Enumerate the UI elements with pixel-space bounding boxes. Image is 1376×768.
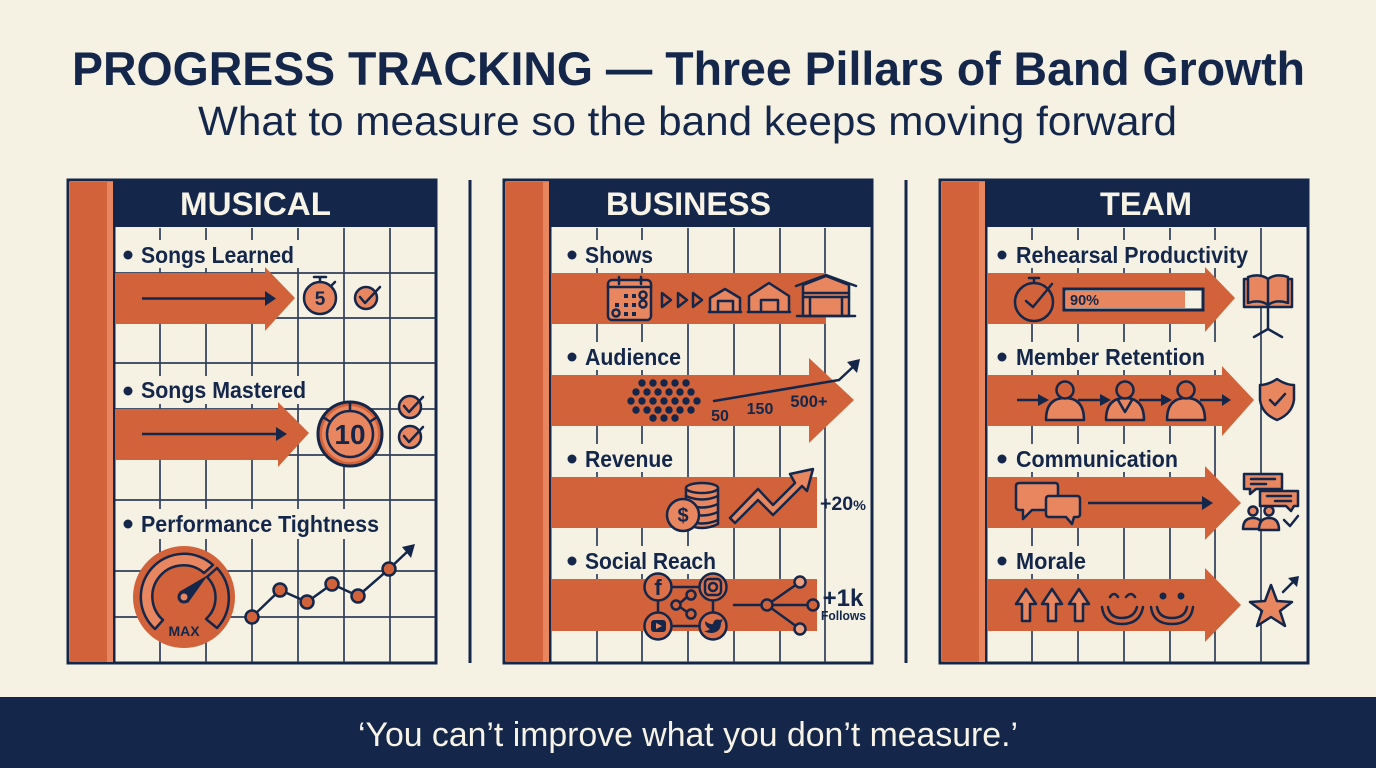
metric: songs learned <box>115 240 380 331</box>
metric: social reach: Social Reach <box>585 548 716 574</box>
panel: musical <box>68 180 436 663</box>
metric: morale: Morale <box>1016 548 1086 574</box>
metric: social reach <box>551 546 866 640</box>
icon: shield <box>1260 379 1294 420</box>
chart: audience growth <box>711 359 860 425</box>
heading: musical: MUSICAL <box>180 186 331 222</box>
icon: double check <box>399 396 423 448</box>
icon: stopwatch 5: 5 <box>315 289 326 310</box>
icon: large venue <box>796 275 856 316</box>
metric: audience <box>551 342 860 443</box>
value: +20%: +20% <box>820 494 867 515</box>
metric: rehearsal productivity: Rehearsal Productivity <box>1016 242 1248 268</box>
icon: small venue <box>709 289 741 312</box>
icon: triangles <box>662 293 702 307</box>
icon: calendar <box>608 277 651 320</box>
heading: team <box>985 180 1308 227</box>
icon: check <box>355 287 380 309</box>
chart: audience growth: 500+ <box>790 393 828 411</box>
icon: gauge: MAX <box>168 623 200 639</box>
icon: medium venue <box>748 283 790 312</box>
title: PROGRESS TRACKING — Three Pillars of Band Growth <box>72 42 1305 95</box>
icon: stopwatch 5 <box>304 277 336 314</box>
icon: coins <box>667 483 718 531</box>
arrow: star rising <box>1283 576 1299 592</box>
metric: audience: Audience <box>585 344 681 370</box>
progress bar 90% <box>1064 289 1203 310</box>
metric: member retention: Member Retention <box>1016 344 1205 370</box>
icon: badge 10: 10 <box>334 419 366 450</box>
metric: songs mastered <box>115 376 423 467</box>
footer banner: ‘You can’t improve what you don’t measure.’ <box>358 716 1018 754</box>
icon: gauge <box>133 546 235 648</box>
icon: music stand <box>1244 275 1292 337</box>
metric: performance tightness: Performance Tightness <box>141 511 379 537</box>
metric: morale <box>987 546 1299 642</box>
icon: coins: $ <box>677 505 689 527</box>
progress bar 90%: 90% <box>1070 293 1099 309</box>
metric: songs learned: Songs Learned <box>141 242 294 268</box>
metric: rehearsal productivity <box>987 240 1292 337</box>
value: +1k follows: +1k <box>823 585 864 612</box>
panel: team <box>940 180 1308 663</box>
metric: performance tightness <box>120 509 415 648</box>
icon: smile <box>1102 594 1143 624</box>
metric: revenue: Revenue <box>585 446 673 472</box>
heading: musical <box>113 180 436 227</box>
arrow line <box>1088 496 1213 510</box>
metric: shows <box>551 240 856 324</box>
icon: network hub <box>734 576 818 634</box>
footer banner <box>0 697 1376 768</box>
value: +1k follows <box>821 585 866 623</box>
icon: smile dots <box>1151 592 1193 624</box>
icon: trend arrow <box>730 469 813 523</box>
icon: social network square: f <box>654 575 662 600</box>
metric: member retention <box>987 342 1294 436</box>
heading: team: TEAM <box>1100 186 1192 222</box>
heading: business: BUSINESS <box>606 186 771 222</box>
icon: star <box>1250 585 1292 626</box>
icon: speech bubbles <box>1016 483 1080 524</box>
line chart: tightness rising <box>246 544 415 624</box>
icon: badge 10 <box>318 402 382 466</box>
icon: social network square <box>644 574 726 640</box>
metric: shows: Shows <box>585 242 653 268</box>
metric: communication <box>987 444 1298 540</box>
metric: communication: Communication <box>1016 446 1178 472</box>
value: +1k follows: Follows <box>821 609 866 623</box>
panel: business <box>504 180 872 663</box>
subtitle: What to measure so the band keeps moving forward <box>198 98 1177 144</box>
icon: crowd dots <box>627 379 701 422</box>
chart: audience growth: 50 <box>711 408 729 425</box>
flow: members <box>1017 382 1231 420</box>
metric: revenue <box>551 444 867 531</box>
icon: stopwatch check <box>1015 278 1053 321</box>
icon: up arrows <box>1016 589 1089 621</box>
chart: audience growth: 150 <box>747 401 773 418</box>
heading: business <box>549 180 872 227</box>
metric: songs mastered: Songs Mastered <box>141 377 306 403</box>
icon: team chat <box>1243 474 1298 530</box>
